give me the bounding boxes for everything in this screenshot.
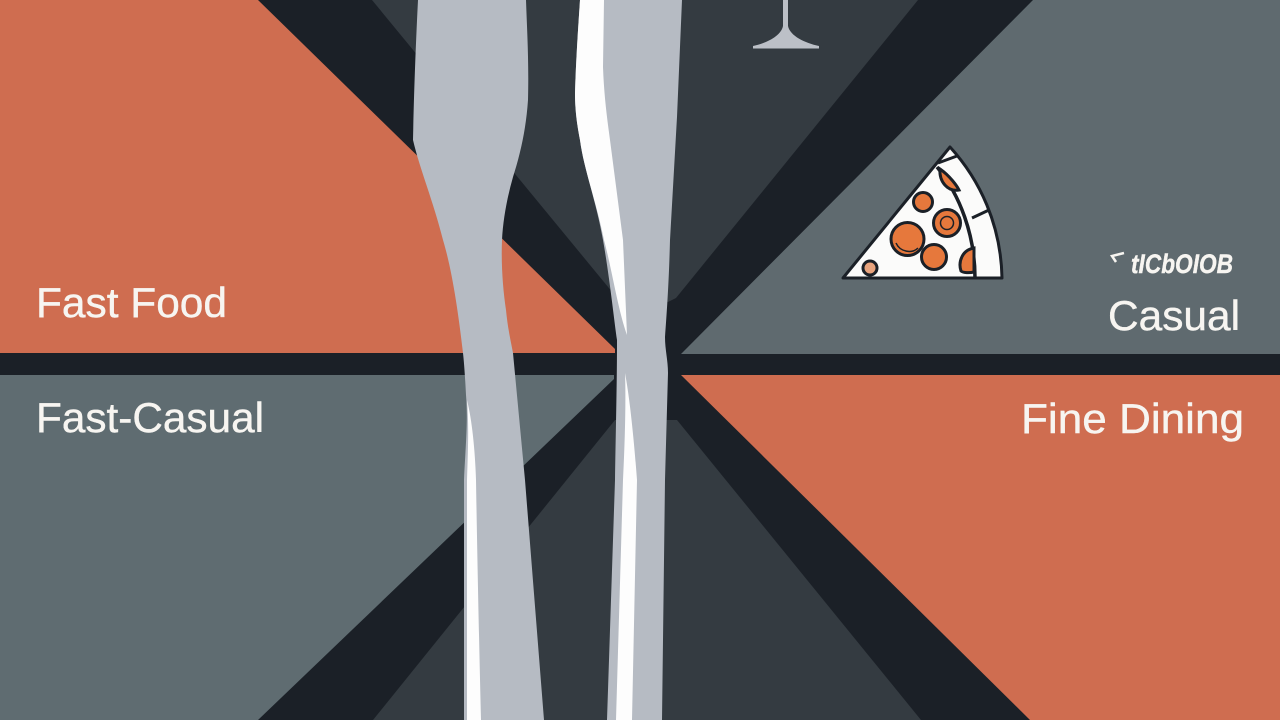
highlight: upper fork: [575, 0, 627, 335]
panel: casual: [681, 0, 1280, 354]
highlight: left knife: [467, 400, 481, 720]
utensil: right fork: [575, 0, 682, 720]
highlight: lower fork: [616, 373, 637, 720]
panel: fast food: [0, 0, 615, 353]
icon: pizza slice: [843, 147, 1002, 278]
panel: top centre wedge: [372, 0, 918, 302]
utensil: left knife: [413, 0, 544, 720]
heading: casual: Casual: [1108, 292, 1240, 339]
icon: wine glass base: [753, 0, 819, 48]
heading: fine dining: Fine Dining: [1021, 395, 1244, 442]
panel: fast-casual: [0, 375, 614, 720]
heading: fast-casual: Fast-Casual: [36, 394, 264, 441]
heading: fast food: Fast Food: [36, 279, 227, 326]
panel: bottom centre wedge: [373, 420, 921, 720]
panel: fine dining: [681, 375, 1280, 720]
garbled label: tICbOIOB: [1131, 249, 1233, 279]
